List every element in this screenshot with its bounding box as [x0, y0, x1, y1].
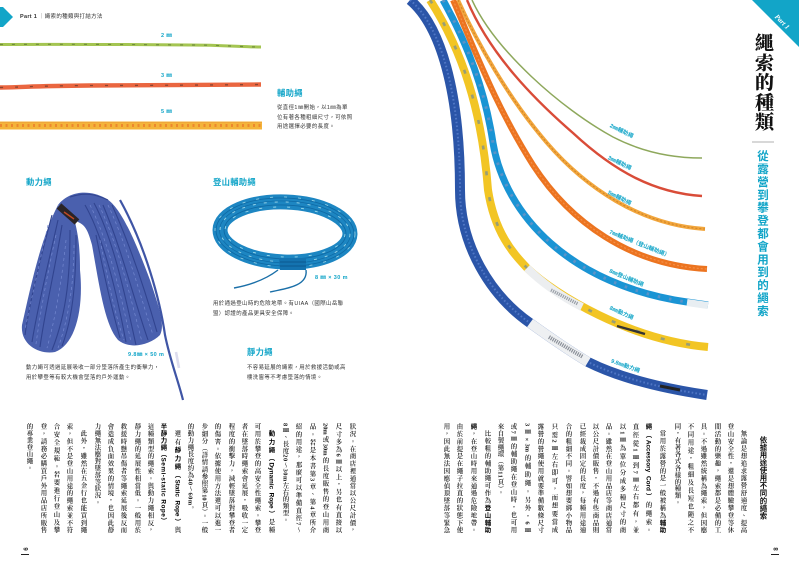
body text: right page: 直徑從1㎜到7㎜左右都有，並: [632, 423, 638, 533]
body text: left page: 靜力繩的延展性相當低。一般用於: [134, 423, 140, 533]
text: accessory cord: 位有著各種粗細尺寸，可依照: [277, 115, 353, 121]
body text: right page: 閒活動的樂趣，繩索都是必備的工: [714, 423, 720, 533]
text: dynamic rope: 動力繩可透過延展吸收一部分墜落所產生的衝擊力，: [26, 365, 160, 371]
rope: 3 mm straight sample: [0, 84, 261, 88]
body text: right page: 由於前提是在繩子拉直的狀態下使: [456, 423, 462, 533]
body text: right page: 繩 ，在登山時用來通過危險地帶。: [470, 423, 476, 533]
column heading: 依據用途使用不同的繩索: [759, 436, 768, 520]
body text: right page: 來自製繩環（第11頁）。: [496, 423, 504, 496]
fan rope: 9.8 mm dynamic: [410, 0, 707, 395]
text: accessory cord: 用途選擇必要的長度。: [277, 124, 335, 130]
heading: accessory cord: 輔助繩: [277, 88, 303, 98]
corner tab text: Part 1: [773, 13, 791, 31]
text: climbing accessory rope: 用於通過登山時的危險地帶。有UIAA（國際山岳聯: [213, 301, 343, 307]
text: climbing accessory rope: [213, 300, 343, 317]
body text: left page: 品。若是本書第3章、第4章所介: [308, 423, 316, 533]
body text: left page: 的專業登山繩。: [26, 423, 32, 471]
body text: left page: 狀況。在商店裡通常以公尺計價，: [348, 423, 356, 533]
text: static rope: 樓洗窗等不考慮墜落的情境。: [247, 375, 323, 381]
fan rope: 3 mm: [467, 0, 702, 196]
body text: right page: 具。不過雖然統稱為繩索，但因應: [700, 423, 706, 533]
body text: left page: 力繩無法應對墜落等狀況。: [94, 423, 100, 506]
heading: climbing accessory rope: 登山輔助繩: [213, 177, 256, 187]
body text: left page: 會造成負面效果的情境，也因此靜: [106, 423, 114, 533]
body text: left page: [26, 423, 356, 534]
rope coil: accessory rope: [214, 195, 356, 292]
rope label: 7 mm: 7㎜輔助繩（登山輔助繩）: [608, 230, 670, 259]
subtitle: 從露營到攀登都會用到的繩索: [756, 150, 768, 318]
page number: 9: [21, 545, 29, 555]
size label: 2 mm: 2 ㎜: [161, 33, 172, 39]
body text: right page: 登山安全性，還是想體驗攀登等休: [726, 423, 734, 533]
body text: left page: 的動力繩長度約為40～60m。: [186, 423, 194, 513]
heading: dynamic rope: 動力繩: [26, 177, 52, 187]
body text: left page: 步細分（詳情請參照第10頁）。一般: [200, 423, 208, 533]
body text: left page: 程度的衝擊力，減輕墜落對攀登者: [228, 423, 234, 533]
body text: left page: 20m或30m的長度販售的登山用商: [322, 423, 328, 533]
page number: 8: 8: [772, 547, 778, 551]
body text: left page: 救援時懸吊傷者等繩索延展後反而: [120, 423, 126, 533]
title divider: [752, 141, 774, 143]
rope label: 8 mm dynamic: 8㎜動力繩: [608, 306, 634, 321]
body text: left page: 合安全規範。若要進行登山及攀: [52, 423, 60, 533]
rope label: 2 mm: 2㎜輔助繩: [608, 123, 634, 140]
body text: left page: 動力繩（Dynamic Rope） 是種: [268, 430, 274, 533]
body text: left page: 此外，雖然在五金行也能買到繩: [80, 430, 86, 533]
body text: left page: 者在墜落時繩索會延展，吸收一定: [240, 423, 248, 533]
fan rope: 5 mm: [458, 0, 705, 229]
heading: static rope: 靜力繩: [247, 347, 273, 357]
body text: right page: 不同用途，粗細及長短也隨之不: [686, 423, 694, 533]
body text: right page: 同，有著各式各樣的種類。: [674, 423, 680, 506]
body text: right page: 露營的營繩使用就要準備數條尺寸: [536, 423, 544, 533]
main title: 繩索的種類: [752, 33, 773, 132]
rope coil: dynamic rope: [22, 193, 183, 400]
corner tab: [752, 0, 799, 47]
text: accessory cord: [277, 104, 353, 130]
body text: right page: 只需2㎜左右即可，而想要當成: [550, 423, 558, 533]
text: static rope: [247, 364, 346, 381]
rope label: 9.8 mm dynamic: 9.8㎜動力繩: [610, 359, 640, 375]
size label: 5 mm: 5 ㎜: [161, 109, 172, 115]
body text: right page: [442, 422, 747, 534]
rope label: 5 mm: 5㎜輔助繩: [607, 190, 632, 207]
body text: left page: 半靜力繩（Semi-static Rope）: [160, 423, 166, 524]
body text: right page: 以1㎜為單位分成多種尺寸的商: [618, 423, 626, 533]
body text: left page: 8㎜、長度20～30m左右的類型。: [282, 423, 288, 523]
body text: right page: 以公尺計價販售，不過有些商品則: [592, 423, 598, 533]
rope label: 8 mm accessory: 8㎜登山輔助繩: [608, 269, 644, 288]
fan of seven ropes: [410, 0, 708, 395]
body text: right page: 或7㎜的輔助繩在登山時，也可用: [510, 423, 516, 533]
body text: right page: 常用於露營的是一般被稱為 輔助: [658, 430, 666, 533]
text: climbing accessory rope: 盟）認證的產品更具安全保障。: [213, 311, 294, 317]
body text: left page: 登，請務必購買戶外用品店所販售: [40, 423, 46, 533]
running header: Part 1 ｜繩索的種類與打結方法: [20, 14, 103, 20]
body text: left page: 可用於攀登的高安全性繩索。攀登: [254, 423, 260, 533]
rope label: 3 mm: 3㎜輔助繩: [606, 155, 632, 172]
fan rope: 8 mm accessory: [443, 0, 708, 306]
fan rope: 8 mm dynamic: [430, 0, 708, 347]
body text: right page: 無論是想追求露營舒適度、提高: [740, 430, 746, 533]
chevron marker: [0, 7, 13, 27]
rope: 2 mm straight sample: [0, 44, 261, 47]
body text: left page: 的傷害。依據使用方法還可以進一: [214, 423, 220, 533]
body text: right page: 用，因此無法因應偵頂墜落等緊急: [442, 423, 450, 533]
body text: right page: 合的粗細不同。譬如想要綁小物品: [564, 423, 572, 533]
size label: 3 mm: 3 ㎜: [161, 73, 172, 79]
text: accessory cord: 從直徑1㎜開始，以1㎜為單: [277, 105, 348, 111]
rope: 5 mm straight sample: [0, 122, 262, 126]
size label: 8 mm x 30 m: 8 ㎜ × 30 m: [315, 275, 348, 281]
text: dynamic rope: 用於攀登等有較大機會墜落的戶外運動。: [26, 375, 131, 381]
fan rope: 2 mm: [472, 0, 702, 158]
body text: left page: 還有 靜力繩（Static Rope） 與: [174, 430, 180, 533]
text: dynamic rope: [26, 364, 160, 381]
fan rope: 7 mm: [453, 0, 707, 269]
body text: left page: 索，但不是登山用途的繩索並不符: [66, 423, 72, 533]
page number: 9: 9: [22, 547, 28, 551]
body text: right page: 品。雖然在登山用品店等商店通常: [604, 423, 612, 533]
page number: 8: [771, 545, 779, 555]
body text: right page: 3㎜×3m的輔助繩。另外，6㎜: [524, 423, 530, 533]
body text: left page: 這種類型的繩索。與動力繩相反，: [146, 423, 154, 533]
text: static rope: 不容易延展的繩索，用於救援活動或高: [247, 365, 346, 371]
body text: right page: 已經裁成固定的長度，每種用途適: [578, 423, 586, 533]
size label: 9.8 mm x 50 m: 9.8㎜ × 50 m: [128, 352, 164, 358]
body text: left page: 尺寸多為6㎜以上，另也有直接以: [334, 423, 342, 533]
body text: left page: 紹的用途，那麼可以準備直徑7～: [294, 423, 302, 533]
body text: right page: 比較粗的輔助繩可作為 登山輔助: [484, 430, 490, 533]
body text: right page: 繩（Accessory Cord） 的繩索。: [644, 423, 652, 533]
